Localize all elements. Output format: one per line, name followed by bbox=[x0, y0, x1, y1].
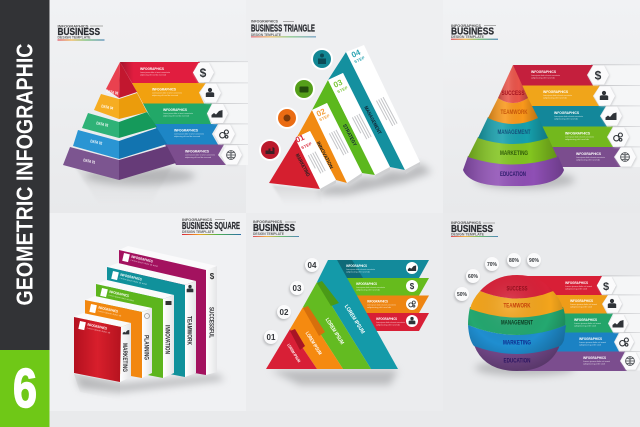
cone ribbon: green bbox=[540, 126, 613, 147]
cone ribbon: orange: Lorem ipsum dolor sit amet consectetur bbox=[543, 94, 572, 97]
sidebar title: GEOMETRIC INFOGRAPHIC bbox=[12, 43, 38, 306]
hex icon: dollar: $ bbox=[200, 66, 207, 80]
sphere ribbon: blue: INFOGRAPHICS bbox=[579, 337, 602, 341]
icon circle: dollar: $ bbox=[410, 282, 415, 291]
number badge 01 bbox=[263, 330, 278, 346]
sphere ribbon: purple: adipiscing elit sed bbox=[583, 362, 605, 366]
hex icon: dollar bbox=[588, 66, 610, 85]
cone layer: teal: MANAGEMENT bbox=[498, 129, 531, 136]
panel 2 header: BUSINESS TRIANGLE bbox=[251, 24, 315, 35]
box: purple: $ bbox=[210, 272, 215, 281]
panel 2 header: INFOGRAPHICS bbox=[251, 20, 279, 24]
ribbon: orange: INFOGRAPHICS bbox=[152, 88, 176, 92]
triangle stripe: orange: LOREM IPSUM bbox=[304, 331, 323, 356]
box: orange bbox=[85, 296, 152, 378]
panel 2: business triangle steps bbox=[251, 20, 432, 205]
hex icon: globe bbox=[615, 148, 637, 167]
parallelogram ribbon: green bbox=[346, 278, 429, 296]
triangle stripe: green bbox=[303, 281, 371, 369]
cone ribbon: purple: Lorem ipsum dolor sit amet consectetur bbox=[576, 156, 605, 159]
hex icon: chart bbox=[207, 104, 229, 124]
box: teal: INFOGRAPHICS bbox=[120, 273, 143, 282]
step 2 strip: 02 bbox=[315, 107, 327, 119]
parallelogram ribbon: teal: Lorem ipsum dolor sit amet consectetur bbox=[346, 268, 375, 271]
sidebar bbox=[0, 0, 50, 350]
sphere ribbon: red bbox=[520, 276, 602, 295]
percent badge 90 bbox=[526, 253, 541, 268]
hex icon: chart bbox=[601, 106, 623, 126]
ribbon: blue: Lorem ipsum dolor sit amet consectetur bbox=[174, 132, 204, 136]
sphere band: orange bbox=[470, 291, 563, 318]
cone ribbon: purple: INFOGRAPHICS bbox=[576, 152, 601, 156]
ribbon: purple: adipiscing elit sed do eiusmod bbox=[185, 156, 211, 159]
pyramid layer: purple bbox=[63, 146, 176, 180]
panel 4: business square bbox=[74, 218, 241, 400]
cone ribbon: red: Lorem ipsum dolor sit amet consectetur bbox=[531, 74, 560, 77]
step 1 block bbox=[269, 131, 336, 192]
sphere band: purple bbox=[474, 345, 560, 371]
step 2 strip: INNOVATION bbox=[315, 141, 334, 170]
sphere ribbon: red: Lorem ipsum dolor sit amet bbox=[565, 285, 592, 288]
percent badge 90: 90% bbox=[529, 258, 540, 264]
hex icon: person bbox=[594, 86, 616, 106]
panel 4 header: INFOGRAPHICS bbox=[182, 218, 213, 222]
icon circle: chart bbox=[406, 262, 418, 274]
hex icon: gears bbox=[214, 124, 236, 144]
cone ribbon: green: Lorem ipsum dolor sit amet consectetur bbox=[565, 136, 594, 138]
sphere ribbon: green bbox=[520, 314, 613, 332]
percent badge 80: 80% bbox=[509, 258, 520, 264]
panel 3 header: DESIGN TEMPLATE bbox=[451, 35, 485, 39]
parallelogram ribbon: orange: Lorem ipsum dolor sit amet consectetur bbox=[367, 304, 396, 306]
ribbon: green: Lorem ipsum dolor sit amet consectetur bbox=[163, 112, 193, 115]
sphere ribbon: orange: Lorem ipsum dolor sit amet bbox=[570, 303, 597, 306]
panel 5 shadow bbox=[270, 370, 398, 385]
icon circle: person bbox=[406, 315, 418, 327]
cone ribbon: teal: adipiscing elit sed do bbox=[554, 118, 579, 120]
ribbon: green: adipiscing elit sed do eiusmod bbox=[163, 114, 189, 118]
ribbon: purple bbox=[165, 144, 226, 165]
hex icon: globe bbox=[221, 146, 243, 165]
box: purple: SUCCESSFUL bbox=[208, 307, 214, 338]
box: teal: TEAMWORK bbox=[186, 316, 192, 346]
panel 3 header: INFOGRAPHICS bbox=[451, 24, 482, 28]
triangle stripe: green: LOREM IPSUM bbox=[324, 317, 345, 346]
cone ribbon: teal: INFOGRAPHICS bbox=[554, 111, 579, 115]
panel 6 header: INFOGRAPHICS bbox=[451, 221, 482, 225]
panel 5 header: DESIGN TEMPLATE bbox=[253, 232, 285, 236]
sphere labels bbox=[501, 286, 533, 364]
parallelogram ribbon: teal: adipiscing elit sed do bbox=[346, 270, 371, 274]
parallelogram ribbon: green: Lorem ipsum dolor sit amet consectetur bbox=[356, 286, 385, 289]
sphere labels: SUCCESS bbox=[506, 286, 528, 292]
hex icon: gears bbox=[608, 128, 630, 147]
box: red: INFOGRAPHICS bbox=[87, 323, 108, 331]
cone ribbon: red: INFOGRAPHICS bbox=[531, 70, 556, 74]
pyramid layer: green bbox=[82, 112, 157, 138]
box: orange: PLANNING bbox=[142, 335, 148, 360]
sphere ribbon: orange: INFOGRAPHICS bbox=[570, 299, 593, 303]
ribbon: red: INFOGRAPHICS bbox=[140, 67, 164, 71]
ribbon: orange: adipiscing elit sed do eiusmod bbox=[152, 94, 178, 97]
circle icon: person bbox=[311, 48, 333, 70]
ribbon: green: INFOGRAPHICS bbox=[163, 108, 187, 112]
ribbon: red bbox=[120, 62, 200, 83]
panel 3 header: BUSINESS bbox=[451, 26, 494, 38]
pyramid layer: blue: DATA 02 bbox=[90, 138, 103, 146]
hex icon: dollar: $ bbox=[595, 68, 602, 82]
panel 1 shadow bbox=[85, 167, 195, 185]
cone ribbon: purple bbox=[550, 147, 621, 167]
percent badge 70: 70% bbox=[487, 262, 498, 268]
parallelogram ribbon: red: INFOGRAPHICS bbox=[376, 317, 397, 321]
pyramid layer: red: DATA 05 bbox=[106, 88, 119, 96]
number badge 02: 02 bbox=[280, 308, 289, 317]
panel 6 header: DESIGN TEMPLATE bbox=[451, 232, 485, 236]
panel 3 ribbon tails bbox=[591, 64, 640, 167]
sphere ribbon: blue bbox=[520, 332, 619, 352]
cone ribbon: orange bbox=[520, 86, 600, 106]
cone layer: red: SUCCESS bbox=[502, 90, 525, 97]
panel 4 header: BUSINESS SQUARE bbox=[182, 221, 240, 232]
sphere ribbon: blue: Lorem ipsum dolor sit amet bbox=[579, 341, 606, 344]
percent badge 60 bbox=[465, 269, 480, 284]
number badge 04 bbox=[304, 258, 319, 274]
box: purple: INFOGRAPHICS bbox=[131, 255, 154, 264]
panel 2 shadows bbox=[320, 163, 432, 195]
number badge 03 bbox=[289, 281, 304, 296]
cone layer: green: MARKETING bbox=[500, 150, 528, 157]
box: red: Lorem ipsum dolor sit bbox=[86, 327, 111, 335]
ribbon: blue: INFOGRAPHICS bbox=[174, 128, 198, 132]
pyramid layer: orange: DATA 04 bbox=[101, 103, 114, 111]
box: orange: INFOGRAPHICS bbox=[98, 306, 119, 314]
box: red: MARKETING bbox=[121, 343, 127, 372]
sphere ribbon: purple: INFOGRAPHICS bbox=[583, 356, 606, 360]
box: teal bbox=[107, 263, 196, 377]
cone ribbon: purple: adipiscing elit sed do bbox=[576, 158, 601, 162]
ribbon: red: adipiscing elit sed do eiusmod bbox=[140, 74, 166, 76]
cone ribbon: red bbox=[513, 65, 593, 86]
parallelogram ribbon: red bbox=[366, 313, 429, 331]
cone layer: green bbox=[468, 137, 557, 164]
panel 1 header: BUSINESS bbox=[58, 27, 100, 38]
sphere ribbon: green: adipiscing elit sed bbox=[574, 324, 596, 328]
ribbon: orange: Lorem ipsum dolor sit amet consectetur bbox=[152, 92, 182, 94]
ribbon: purple: INFOGRAPHICS bbox=[185, 150, 209, 154]
cone layer: red bbox=[498, 65, 528, 103]
ribbon: red: Lorem ipsum dolor sit amet consectetur bbox=[140, 71, 170, 74]
box: green bbox=[96, 280, 174, 378]
sphere band: blue bbox=[468, 325, 566, 354]
panel 1 header bbox=[58, 24, 104, 40]
percent badge 50 bbox=[454, 287, 469, 302]
ribbon: green bbox=[143, 104, 212, 124]
ribbon: blue: adipiscing elit sed do eiusmod bbox=[174, 135, 200, 138]
panel 6 shadow bbox=[475, 360, 575, 376]
parallelogram ribbon: red: Lorem ipsum dolor sit amet consectetur bbox=[376, 321, 405, 324]
panel 6: sphere bbox=[451, 221, 640, 376]
panel 3 header bbox=[451, 24, 498, 40]
hex icon: dollar: $ bbox=[603, 281, 609, 293]
sphere ribbon: green: INFOGRAPHICS bbox=[574, 318, 597, 322]
hex icon: globe bbox=[621, 352, 640, 370]
step 4 strip bbox=[328, 45, 420, 174]
hex icon: dollar bbox=[193, 63, 215, 83]
sphere ribbon: blue: adipiscing elit sed bbox=[579, 344, 601, 346]
parallelogram ribbon: orange: adipiscing elit sed do bbox=[367, 306, 392, 309]
step 2 strip: STEP bbox=[318, 113, 331, 122]
sphere ribbon: orange: adipiscing elit sed bbox=[570, 306, 592, 308]
sphere ribbon: red: INFOGRAPHICS bbox=[565, 281, 588, 285]
panel 1: layered pyramid bbox=[58, 24, 248, 205]
panel 1 header: INFOGRAPHICS bbox=[58, 24, 89, 28]
step 1 block: 01 bbox=[294, 133, 306, 145]
hex icon: dollar bbox=[597, 277, 617, 295]
parallelogram ribbon: orange bbox=[356, 296, 429, 313]
ribbon: purple: Lorem ipsum dolor sit amet consectetur bbox=[185, 154, 215, 156]
panel 3 shadow bbox=[475, 171, 575, 189]
number badge 03: 03 bbox=[293, 284, 302, 293]
sphere band: red bbox=[480, 275, 553, 298]
pyramid layer: orange bbox=[94, 93, 147, 119]
sphere labels: MANAGEMENT bbox=[501, 320, 533, 326]
hex icon: gears bbox=[615, 333, 635, 351]
number badge 04: 04 bbox=[308, 261, 317, 270]
panel 4 header: DESIGN TEMPLATE bbox=[182, 230, 215, 234]
circle icon: globe bbox=[276, 107, 298, 129]
sphere ribbon: orange bbox=[520, 295, 608, 314]
percent badge 60: 60% bbox=[468, 274, 479, 280]
panel 4 header bbox=[182, 218, 241, 235]
step 4 strip: 04 bbox=[350, 48, 362, 60]
panel 2 header: DESIGN TEMPLATE bbox=[251, 33, 282, 37]
pyramid layer: green: DATA 03 bbox=[96, 120, 109, 128]
percent badge 50: 50% bbox=[457, 292, 468, 298]
icon circle: dollar bbox=[406, 280, 418, 292]
panel 5 header bbox=[253, 220, 299, 237]
sphere ribbon: purple: Lorem ipsum dolor sit amet bbox=[583, 360, 610, 363]
step 4 strip: MANAGEMENT bbox=[362, 105, 382, 135]
parallelogram ribbon: orange: INFOGRAPHICS bbox=[367, 300, 388, 304]
cone layer: purple bbox=[463, 156, 564, 186]
cone layer: orange: TEAMWORK bbox=[500, 109, 528, 116]
cone ribbon: teal bbox=[530, 106, 607, 126]
cone ribbon: green: adipiscing elit sed do bbox=[565, 138, 590, 141]
panel 6 header bbox=[451, 221, 498, 237]
box: green: INFOGRAPHICS bbox=[109, 290, 130, 298]
hex icon: person bbox=[603, 295, 623, 313]
panel 4 shadow bbox=[76, 374, 225, 392]
triangle stripe: teal bbox=[317, 260, 398, 369]
circle icon: briefcase bbox=[293, 78, 315, 100]
number badge 02 bbox=[276, 305, 291, 320]
step 2 strip bbox=[297, 103, 362, 186]
box: teal: Lorem ipsum dolor sit amet bbox=[119, 277, 148, 286]
parallelogram ribbon: green: INFOGRAPHICS bbox=[356, 282, 377, 286]
cone layer: orange bbox=[488, 98, 538, 124]
cone ribbon: orange: adipiscing elit sed do bbox=[543, 96, 568, 100]
sphere shading bbox=[468, 285, 566, 371]
panel 1 header: DESIGN TEMPLATE bbox=[58, 36, 91, 40]
ribbon: orange bbox=[132, 83, 206, 104]
number badge 01: 01 bbox=[267, 333, 276, 342]
sphere labels: EDUCATION bbox=[504, 358, 531, 364]
pyramid layer: blue bbox=[73, 128, 167, 159]
cone layer: purple: EDUCATION bbox=[500, 171, 526, 178]
step 3 strip: STRATEGY bbox=[341, 123, 358, 148]
triangle stripe: red: LOREM IPSUM bbox=[286, 343, 302, 364]
sphere ribbon: purple bbox=[520, 352, 627, 371]
cone layer: teal bbox=[478, 117, 548, 144]
step 3 strip: 03 bbox=[332, 78, 344, 90]
hex icon: chart bbox=[609, 315, 629, 333]
cone ribbon: green: INFOGRAPHICS bbox=[565, 132, 590, 136]
parallelogram ribbon: red: adipiscing elit sed do bbox=[376, 324, 401, 326]
sphere labels: TEAMWORK bbox=[504, 302, 531, 310]
panel 5 header: BUSINESS bbox=[253, 223, 295, 234]
panel 5: striped triangle bbox=[253, 220, 429, 385]
cone ribbon: teal: Lorem ipsum dolor sit amet consectetur bbox=[554, 115, 583, 118]
panel 5 header: INFOGRAPHICS bbox=[253, 220, 283, 224]
step 1 block: MARKETING bbox=[294, 153, 311, 178]
circle icon: chart bbox=[259, 139, 281, 161]
sphere ribbon: red: adipiscing elit sed bbox=[565, 288, 587, 290]
percent badge 80 bbox=[506, 253, 521, 268]
number six: 6 bbox=[13, 357, 37, 419]
ribbon: blue bbox=[154, 124, 218, 144]
parallelogram ribbon: teal: INFOGRAPHICS bbox=[346, 264, 367, 268]
box: purple: Lorem ipsum dolor sit amet bbox=[130, 259, 159, 268]
pyramid layer: purple: DATA 01 bbox=[83, 157, 96, 165]
panel 1 ribbon tails bbox=[198, 61, 248, 165]
panel 2 header bbox=[251, 20, 316, 37]
sphere band: green bbox=[468, 307, 565, 335]
hex icon: person bbox=[200, 84, 222, 103]
parallelogram ribbon: teal bbox=[328, 260, 429, 278]
cone ribbon: orange: INFOGRAPHICS bbox=[543, 90, 568, 94]
cone ribbon: red: adipiscing elit sed do bbox=[531, 76, 556, 80]
panel 6 ribbon tails bbox=[600, 276, 640, 370]
icon circle: gears bbox=[406, 298, 418, 310]
panel 6 header: BUSINESS bbox=[451, 224, 493, 235]
triangle stripe: red bbox=[266, 329, 317, 369]
percent badge 70 bbox=[484, 257, 499, 272]
step 4 strip: STEP bbox=[353, 55, 366, 64]
parallelogram ribbon: green: adipiscing elit sed do bbox=[356, 288, 381, 292]
pyramid layer: red bbox=[106, 62, 137, 98]
sphere ribbon: green: Lorem ipsum dolor sit amet bbox=[574, 322, 601, 325]
step 1 block: STEP bbox=[300, 141, 313, 150]
box: red bbox=[74, 313, 131, 382]
box: green: INNOVATION bbox=[164, 325, 170, 354]
green number block bbox=[0, 350, 50, 427]
triangle stripe: teal: LOREM IPSUM bbox=[343, 304, 366, 335]
step 3 strip: STEP bbox=[336, 85, 349, 94]
box: orange: Lorem ipsum dolor sit bbox=[97, 310, 122, 318]
box: green: Lorem ipsum dolor sit amet bbox=[108, 294, 135, 303]
sphere labels: MARKETING bbox=[503, 340, 531, 346]
triangle stripe: orange bbox=[290, 306, 343, 369]
step 3 strip bbox=[312, 73, 390, 179]
panel 3: cone pyramid bbox=[451, 24, 640, 189]
box: purple bbox=[119, 246, 217, 375]
